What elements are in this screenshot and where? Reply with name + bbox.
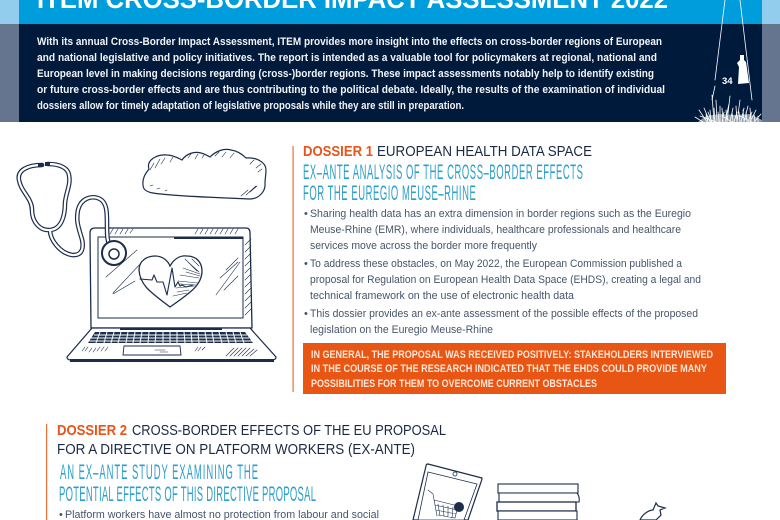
- icon: boundary marker with grass: [695, 0, 762, 122]
- dossier 1 bullet points: •: [304, 258, 308, 270]
- intro text: and national legislative and policy initiatives. The report is intended as a valuable tool for policymakers at regional, national and: [37, 52, 657, 64]
- illustration: laptop with heart: [67, 228, 276, 362]
- dossier 1 bullet points: •: [304, 208, 308, 220]
- touchpad: [123, 346, 181, 355]
- panel: dossier 1: [303, 143, 726, 394]
- dossier 1 bullet points: proposal for Regulation on European Health Data Space (EHDS), creating a legal and: [310, 274, 701, 286]
- dossier 1 heading: [303, 143, 592, 160]
- dossier 1 bullet points: legislation on the Euregio Meuse-Rhine: [310, 324, 493, 336]
- dossier 2 heading: CROSS-BORDER EFFECTS OF THE EU PROPOSAL: [132, 422, 446, 439]
- cart badge: [454, 502, 464, 512]
- dossier 1 heading: DOSSIER 1: [303, 143, 373, 160]
- grass: [695, 95, 761, 122]
- book 2: [499, 493, 579, 502]
- dossier 1 heading: EUROPEAN HEALTH DATA SPACE: [377, 143, 592, 160]
- right slate edge: [762, 24, 780, 122]
- navy panel background: [19, 24, 762, 122]
- header banner: [0, 0, 780, 24]
- left slate edge: [0, 24, 19, 122]
- grass base: [698, 114, 762, 122]
- marker post: [737, 55, 749, 84]
- base front edge: [70, 359, 274, 362]
- blue title band: [19, 0, 762, 24]
- marker tower lines: [712, 0, 752, 100]
- shopping cart: [428, 490, 458, 518]
- callout: key finding: [303, 343, 726, 394]
- dossier 2 heading: DOSSIER 2: [57, 422, 127, 439]
- intro text: dossiers allow for timely adaptation of legislative proposals while they are still in preparation.: [37, 100, 464, 112]
- dossier 2 subheading: [59, 461, 316, 506]
- cloud outline: [143, 149, 266, 199]
- panel: dossier 2: [57, 422, 446, 520]
- book 1: [498, 484, 578, 493]
- heart shading: [173, 259, 200, 296]
- tablet body: [413, 464, 482, 520]
- camera: [453, 472, 457, 476]
- illustration: tablet with shopping cart: [413, 464, 482, 520]
- hinge: [120, 328, 222, 330]
- dossier 2 heading: FOR A DIRECTIVE ON PLATFORM WORKERS (EX-ANTE): [57, 441, 415, 458]
- illustration: stack of books: [497, 484, 579, 520]
- dossier 1 bullet points: technical framework on the use of electronic health data: [310, 290, 575, 302]
- illustration: cloud: [143, 149, 266, 199]
- cloud shading: [150, 152, 262, 196]
- chest piece: [102, 241, 126, 265]
- dossier 2 heading: [57, 422, 446, 458]
- screen reflections: [106, 250, 240, 295]
- illustration: stethoscope: [19, 162, 126, 265]
- lid shading: [105, 229, 251, 315]
- callout: key finding: POSSIBILITIES FOR THEM TO OVERCOME CURRENT OBSTACLES: [311, 378, 597, 390]
- section divider: dossier 2: [46, 424, 47, 520]
- marker number: 34: [722, 76, 733, 87]
- intro text: European level in making decisions regarding (cross-)border regions. These impact assessments notably help to identify existing: [37, 68, 654, 80]
- book 4: [498, 511, 577, 520]
- dossier 1 subheading: FOR THE EUREGIO MEUSE–RHINE: [303, 182, 476, 205]
- dossier 1 subheading: [303, 161, 583, 205]
- intro text: or future cross-border effects and are thus contributing to the political debate. Ideally, the results of the examination of individual: [37, 84, 665, 96]
- laptop lid: [90, 228, 252, 328]
- heartbeat line: [140, 268, 193, 295]
- intro panel: [0, 24, 780, 122]
- dossier 1 bullet points: [304, 208, 701, 336]
- chest piece inner: [109, 249, 119, 259]
- laptop screen: [98, 237, 243, 318]
- keyboard: [88, 332, 253, 343]
- book 3: [497, 502, 576, 511]
- stethoscope tube, dark: [19, 164, 112, 255]
- dossier 1 bullet points: This dossier provides an ex-ante assessment of the possible effects of the proposed: [310, 308, 698, 320]
- callout: key finding: IN THE COURSE OF THE RESEARCH INDICATED THAT THE EHDS COULD PROVIDE MANY: [311, 363, 707, 375]
- right light-blue edge: [762, 0, 780, 24]
- section divider: dossier 1: [292, 146, 294, 392]
- stethoscope tube, highlight: [19, 164, 112, 255]
- dossier 2 subheading: POTENTIAL EFFECTS OF THIS DIRECTIVE PROPOSAL: [59, 483, 316, 506]
- callout: key finding: IN GENERAL, THE PROPOSAL WAS RECEIVED POSITIVELY: STAKEHOLDERS INTERVIEWED: [311, 349, 713, 361]
- intro text: [37, 36, 665, 112]
- dossier 1 bullet points: •: [304, 308, 308, 320]
- dossier 1 bullet points: services move across the border more frequently: [310, 240, 537, 252]
- illustration: small cropped figure: [640, 503, 665, 520]
- tablet screen: [418, 472, 477, 520]
- dossier 2 subheading: AN EX–ANTE STUDY EXAMINING THE: [60, 461, 258, 484]
- left light-blue edge: [0, 0, 19, 24]
- dossier 1 bullet points: Meuse-Rhine (EMR), where individuals, healthcare professionals and healthcare: [310, 224, 681, 236]
- dossier 1 subheading: EX–ANTE ANALYSIS OF THE CROSS–BORDER EFFECTS: [303, 161, 583, 184]
- screen top shadow: [174, 237, 243, 239]
- intro text: With its annual Cross-Border Impact Assessment, ITEM provides more insight into the effects on cross-border regions of European: [37, 36, 662, 48]
- heart: [139, 256, 202, 307]
- palm rest shading: [82, 347, 257, 356]
- ear tips: [38, 162, 50, 167]
- dossier 1 bullet points: Sharing health data has an extra dimension in border regions such as the Euregio: [310, 208, 691, 220]
- dossier 1 bullet points: To address these obstacles, on May 2022, the European Commission published a: [310, 258, 683, 270]
- laptop base: [67, 328, 276, 360]
